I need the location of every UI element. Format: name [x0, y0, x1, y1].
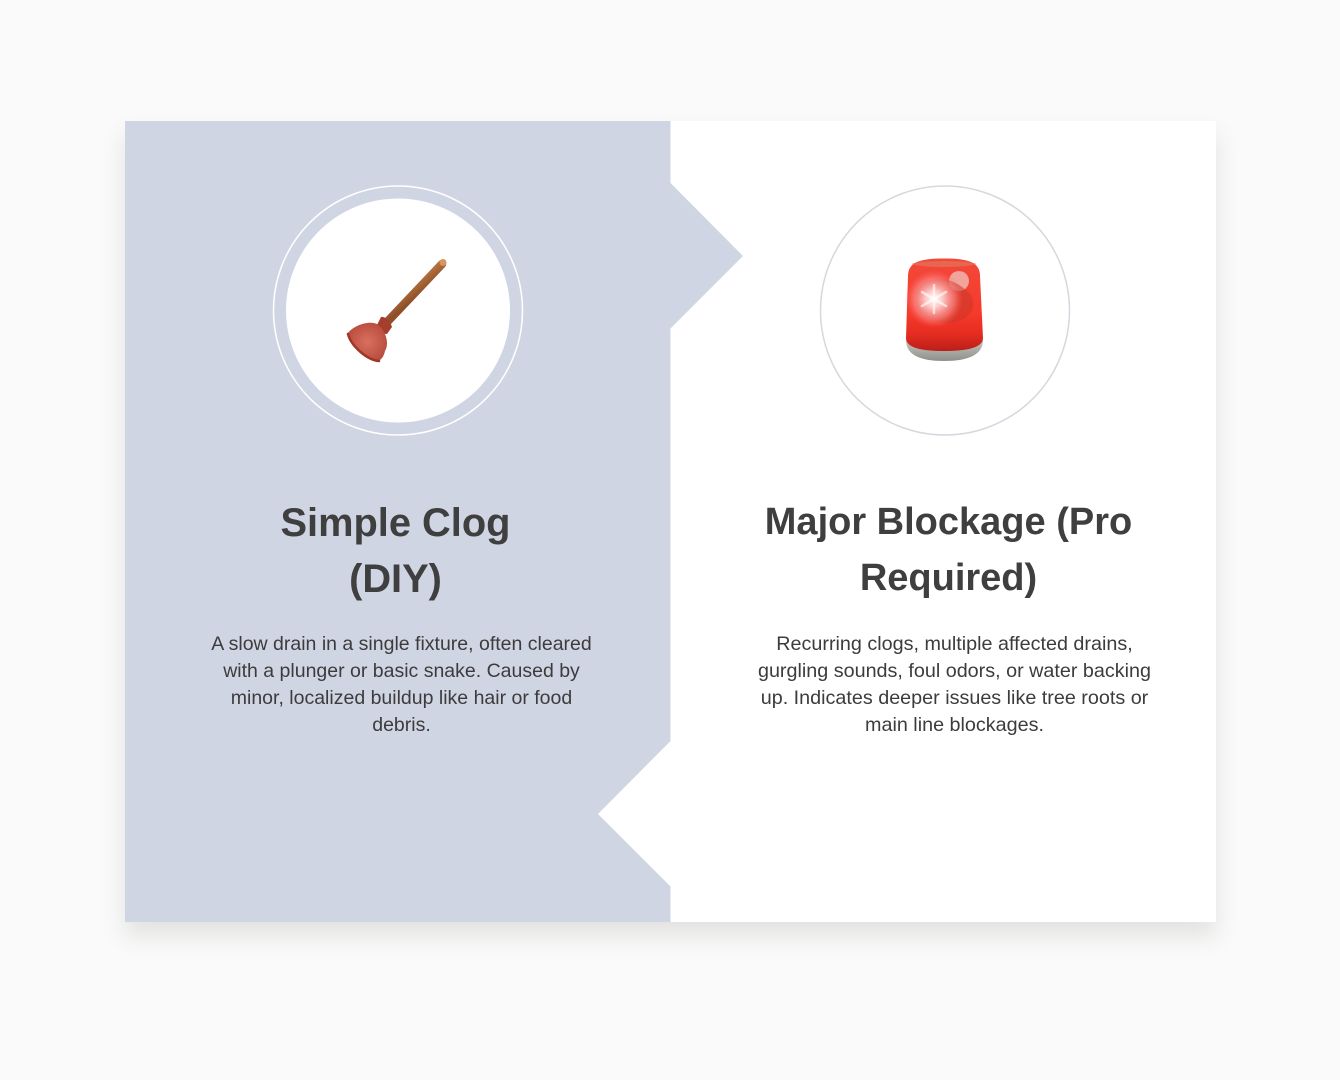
text: simple clog description: minor, localized buildup like hair or food — [231, 687, 572, 709]
comparison card — [125, 121, 1216, 922]
text: simple clog description: with a plunger or basic snake. Caused by — [223, 660, 580, 682]
heading: simple clog — [281, 501, 510, 601]
text: simple clog description: debris. — [372, 714, 431, 736]
plunger handle — [388, 264, 442, 321]
text: major blockage description — [758, 633, 1151, 736]
text: major blockage description: gurgling sounds, foul odors, or water backing — [758, 660, 1151, 682]
heading: simple clog: Simple Clog — [281, 501, 510, 545]
heading: major blockage: Major Blockage (Pro — [765, 501, 1132, 543]
plunger neck — [373, 317, 392, 334]
heading: major blockage — [765, 501, 1132, 599]
icon: red siren in circle — [820, 185, 1070, 436]
plunger cup — [348, 323, 387, 361]
text: simple clog description — [211, 633, 592, 736]
icon: plunger in circle — [272, 185, 524, 436]
text: major blockage description: Recurring clogs, multiple affected drains, — [776, 633, 1133, 655]
heading: simple clog: (DIY) — [349, 557, 442, 601]
text: major blockage description: main line blockages. — [865, 714, 1044, 736]
heading: major blockage: Required) — [860, 557, 1037, 599]
text: major blockage description: up. Indicates deeper issues like tree roots or — [761, 687, 1148, 709]
text: simple clog description: A slow drain in a single fixture, often cleared — [211, 633, 592, 655]
